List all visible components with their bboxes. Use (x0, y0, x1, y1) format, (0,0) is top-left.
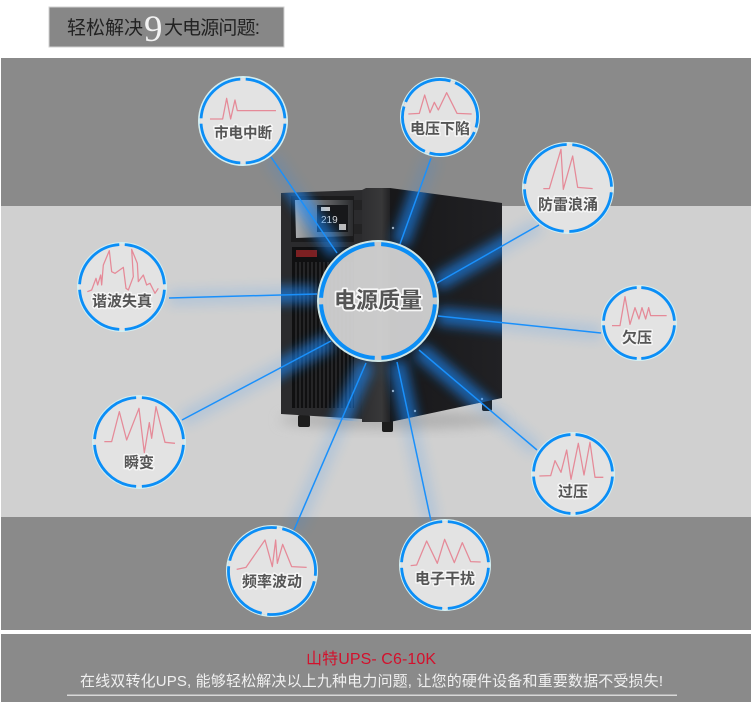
cabinet centre strip (362, 188, 390, 422)
bubble: 频率波动: 频率波动 (242, 572, 302, 590)
blue glow around rays (169, 157, 601, 530)
bubble: 谐波失真 (78, 243, 166, 331)
bubble: 电子干扰: 电子干扰 (415, 570, 475, 588)
bubble: 欠压 (602, 286, 676, 360)
control panel: 219 (321, 215, 338, 226)
waveform (539, 442, 603, 479)
bubble: 防雷浪涌: 防雷浪涌 (538, 196, 598, 214)
waveform (543, 149, 593, 189)
bubble: 电子干扰 (400, 520, 490, 610)
bubble: 电压下陷 (392, 69, 488, 165)
title banner (49, 7, 284, 50)
bubble: 频率波动 (222, 521, 322, 621)
title banner: 9 (144, 9, 162, 50)
vent grille (292, 247, 354, 408)
waveform (612, 297, 667, 326)
title banner: 大电源问题: (164, 17, 260, 39)
cabinet feet (298, 398, 492, 432)
bubble: 过压: 过压 (558, 484, 588, 500)
waveform (87, 249, 158, 293)
summary sentence: 在线双转化UPS, 能够轻松解决以上九种电力问题, 让您的硬件设备和重要数据不受损失! (80, 673, 663, 690)
cabinet front (281, 190, 362, 419)
bubble: 市电中断 (199, 77, 287, 165)
cabinet side (390, 188, 502, 422)
waveform (408, 93, 472, 114)
rays from centre to problem bubbles (169, 157, 601, 530)
bubble: 瞬变: 瞬变 (124, 454, 154, 472)
centre bubble: 电源质量 (318, 241, 438, 361)
bubble: 电压下陷: 电压下陷 (410, 120, 470, 138)
bubble: 过压 (532, 433, 614, 515)
waveform (104, 407, 175, 453)
brand logo (296, 250, 317, 257)
waveform (411, 539, 481, 566)
UPS cabinet (280, 188, 504, 432)
centre bubble: 电源质量: 电源质量 (334, 288, 422, 313)
control panel (291, 196, 362, 242)
bubble: 防雷浪涌 (523, 143, 613, 233)
screws (392, 227, 483, 412)
bubble: 市电中断: 市电中断 (214, 124, 272, 142)
product name: 山特UPS- C6-10K (306, 650, 436, 668)
bubble: 欠压: 欠压 (622, 328, 652, 346)
waveform (210, 98, 276, 119)
title banner: 轻松解决 (67, 17, 143, 39)
panel: bottom summary (1, 634, 751, 702)
bubble: 瞬变 (93, 396, 185, 488)
bubble: 谐波失真: 谐波失真 (92, 292, 152, 310)
waveform (237, 540, 307, 569)
